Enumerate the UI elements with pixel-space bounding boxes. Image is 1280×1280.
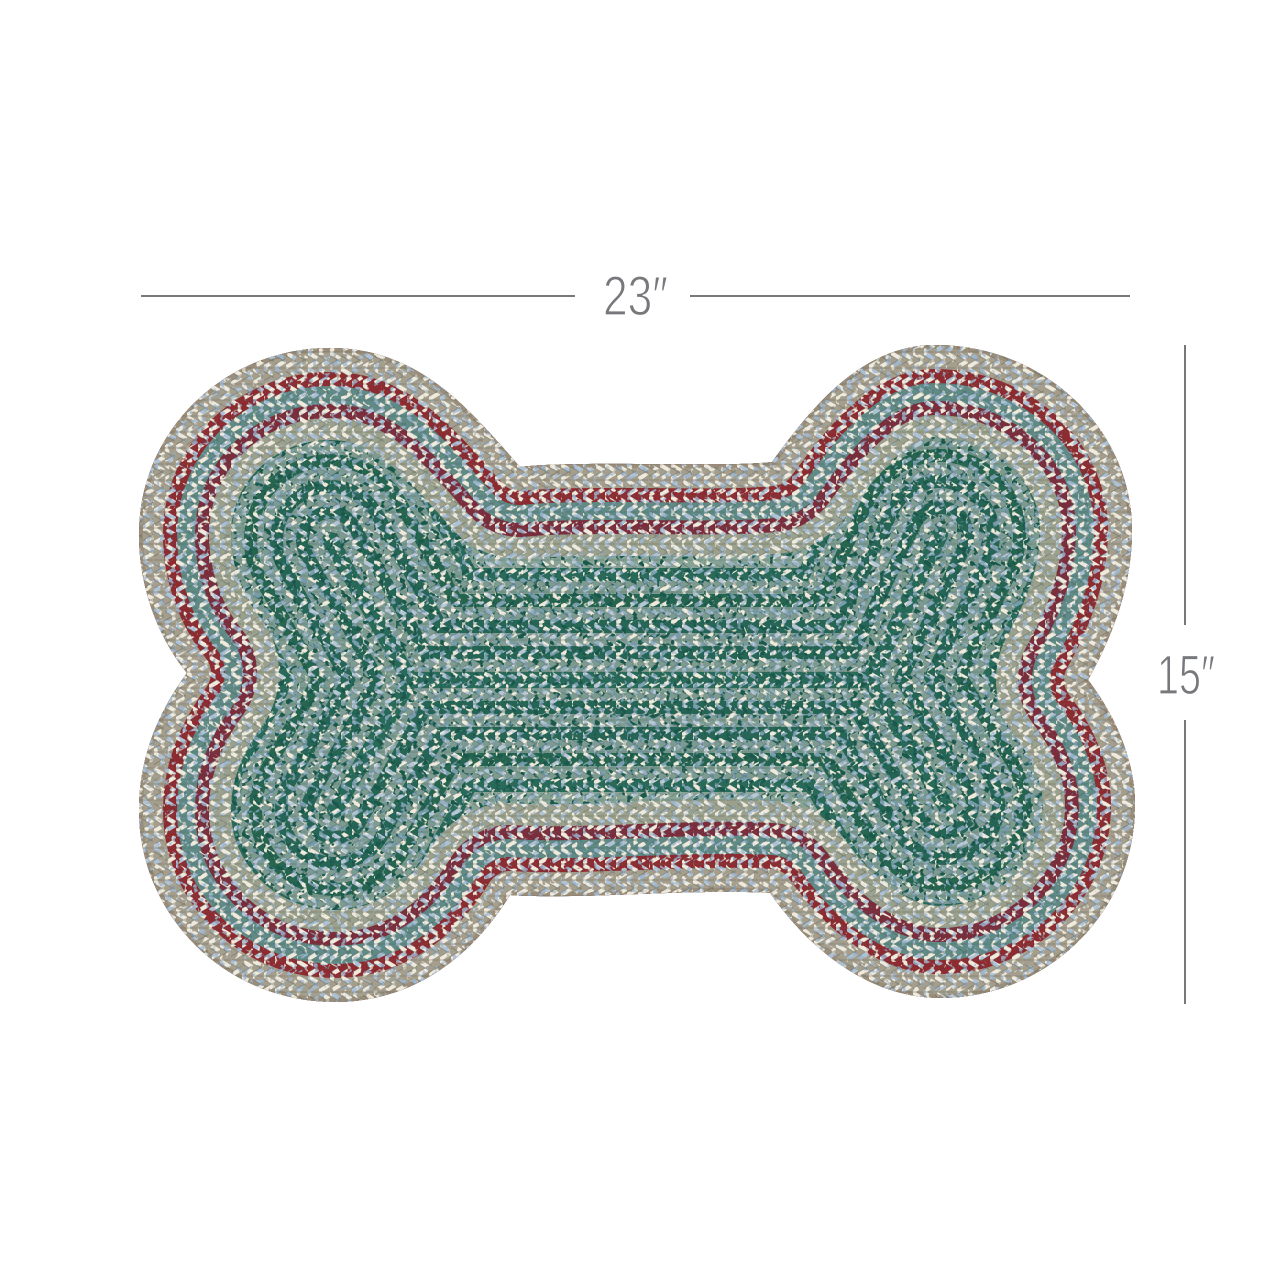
interior rows following the bone skeleton <box>130 340 1140 1010</box>
height dimension line: 15 inches: 15″ <box>1157 643 1215 706</box>
outer border bands <box>130 340 1140 1010</box>
width dimension line: 23 inches: 23″ <box>603 264 668 327</box>
braided bone-shaped rug <box>130 340 1140 1010</box>
infographic canvas <box>139 276 1214 1004</box>
